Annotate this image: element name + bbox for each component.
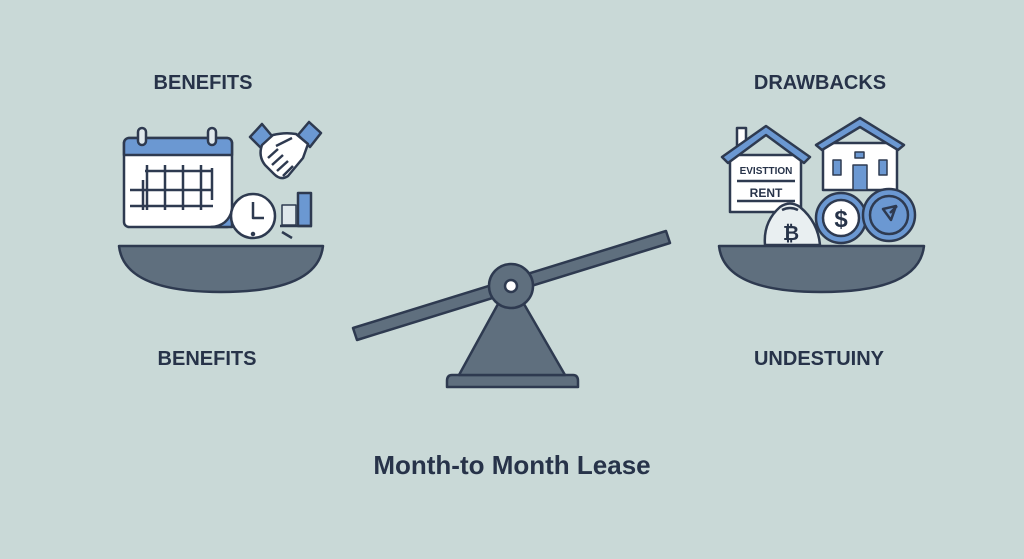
seesaw beam [353, 231, 670, 340]
right pan group [719, 118, 924, 292]
icon: calendar [124, 128, 232, 227]
icon: house [816, 118, 904, 190]
heading: benefits: BENEFITS [154, 72, 252, 94]
pivot [489, 264, 533, 308]
icon: eviction house: RENT [750, 186, 783, 200]
icon: eviction house [722, 126, 810, 212]
label: benefits: BENEFITS [158, 348, 256, 370]
icon: money bag: ₿ [783, 223, 799, 245]
icon: dollar coin: $ [834, 206, 848, 233]
pan: left [119, 246, 323, 292]
seesaw triangle [459, 304, 565, 375]
seesaw [353, 231, 670, 387]
seesaw base [447, 375, 578, 387]
icon: eviction house: EVISTTION [740, 166, 792, 177]
icon: money bag [765, 204, 820, 245]
icon: bar chart [280, 193, 312, 238]
icon: dollar coin [816, 193, 866, 243]
heading: drawbacks: DRAWBACKS [754, 72, 886, 94]
left pan group [119, 122, 323, 292]
title: Month-to Month Lease [373, 450, 651, 480]
icon: arrow coin [863, 189, 915, 241]
pan: right [719, 246, 924, 292]
label: undestuiny: UNDESTUINY [754, 348, 885, 370]
icon: clock [231, 194, 275, 238]
icon: handshake [250, 122, 321, 178]
